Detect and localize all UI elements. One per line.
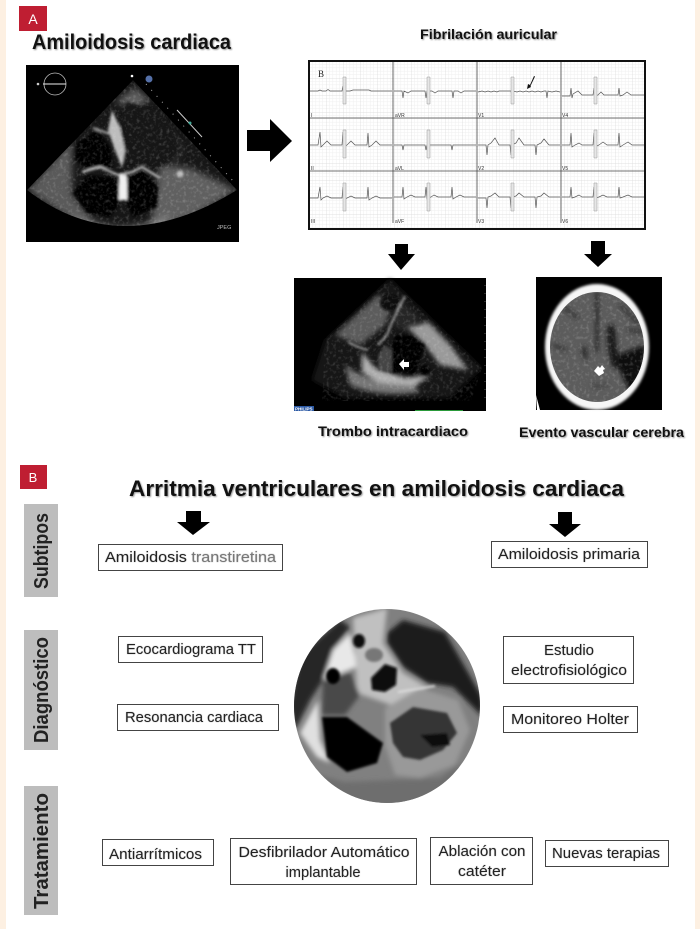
box: Estudio electrofisiológico: Estudio: [544, 642, 594, 659]
image: echocardiogram four chambers: JPEG: [217, 225, 231, 231]
arrow: down to transtiretina: [177, 511, 210, 535]
image: intracardiac thrombus echocardiogram: PHILIPS: [295, 406, 313, 412]
panel B badge: B: [29, 470, 37, 485]
box: Ablación con catéter: Ablación con: [438, 843, 526, 860]
box: Estudio electrofisiológico: [504, 636, 634, 684]
chart: 12-lead ECG: V3: [478, 219, 484, 225]
caption: Trombo intracardiaco: Trombo intracardiaco: [318, 423, 468, 439]
image: echocardiogram four chambers: [26, 65, 239, 242]
box: Antiarrítmicos: Antiarrítmicos: [109, 846, 202, 863]
panel A badge: A: [28, 11, 38, 27]
arrow: down to stroke: [584, 241, 612, 267]
ECG arrow: [527, 76, 535, 89]
box: Amiloidosis transtiretina: [98, 544, 282, 570]
box: Amiloidosis primaria: [492, 542, 648, 568]
box: Ablación con catéter: [430, 838, 532, 884]
box: Nuevas terapias: Nuevas terapias: [552, 845, 660, 862]
side label: Diagnóstico: [24, 630, 58, 750]
box: Amiloidosis transtiretina: Amiloidosis transtiretina: [105, 549, 277, 566]
panel B badge: [20, 465, 47, 489]
title: Amiloidosis cardiaca: Amiloidosis cardiaca: [32, 31, 231, 54]
chart: 12-lead ECG: V2: [478, 166, 484, 172]
box: Monitoreo Holter: Monitoreo Holter: [511, 711, 629, 728]
box: Estudio electrofisiológico: electrofisiológico: [511, 662, 627, 679]
heading: Arritmia ventriculares en amiloidosis cardiaca: Arritmia ventriculares en amiloidosis cardiaca: [129, 476, 625, 501]
box: Amiloidosis primaria: Amiloidosis primaria: [498, 546, 641, 563]
box: Desfibrilador Automático implantable: [230, 838, 416, 884]
chart: 12-lead ECG: aVL: [395, 166, 404, 172]
side label: Diagnóstico: Diagnóstico: [31, 637, 53, 743]
panel A badge: [19, 6, 47, 31]
box: Desfibrilador Automático implantable: Desfibrilador Automático: [238, 844, 410, 861]
chart: 12-lead ECG: III: [311, 219, 315, 225]
chart: 12-lead ECG: [309, 61, 645, 229]
arrow: right to ECG: [247, 119, 292, 162]
box: Resonancia cardiaca: Resonancia cardiaca: [125, 709, 264, 726]
chart: 12-lead ECG: V6: [562, 219, 568, 225]
side label: Subtipos: [24, 504, 58, 597]
arrow: down to thrombus: [388, 244, 415, 270]
chart: 12-lead ECG: V5: [562, 166, 568, 172]
side label: Tratamiento: [24, 786, 58, 915]
chart: 12-lead ECG: V4: [562, 113, 568, 119]
arrow: down to primaria: [549, 512, 581, 537]
image: cardiac MRI circle: [290, 608, 482, 806]
box: Ecocardiograma TT: Ecocardiograma TT: [126, 641, 256, 658]
chart: 12-lead ECG: aVR: [395, 113, 405, 119]
box: Antiarrítmicos: [102, 840, 214, 866]
image: brain CT scan: [536, 277, 662, 410]
chart: 12-lead ECG: V1: [478, 113, 484, 119]
chart: 12-lead ECG: B: [318, 69, 324, 79]
heading: Fibrilación auricular: Fibrilación auricular: [420, 27, 558, 42]
box: Ecocardiograma TT: [118, 636, 262, 662]
chart: 12-lead ECG: II: [311, 166, 314, 172]
box: Ablación con catéter: catéter: [458, 863, 506, 880]
side label: Tratamiento: Tratamiento: [31, 793, 53, 909]
ECG traces: [310, 86, 644, 208]
box: Monitoreo Holter: [504, 706, 638, 732]
chart: 12-lead ECG: aVF: [395, 219, 404, 225]
chart: 12-lead ECG: I: [311, 113, 312, 119]
caption: Evento vascular cerebra: Evento vascular cerebra: [519, 424, 684, 440]
box: Nuevas terapias: [546, 840, 668, 866]
image: intracardiac thrombus echocardiogram: [294, 278, 486, 412]
box: Desfibrilador Automático implantable: implantable: [286, 864, 360, 881]
box: Resonancia cardiaca: [118, 704, 278, 730]
side label: Subtipos: Subtipos: [31, 513, 53, 589]
